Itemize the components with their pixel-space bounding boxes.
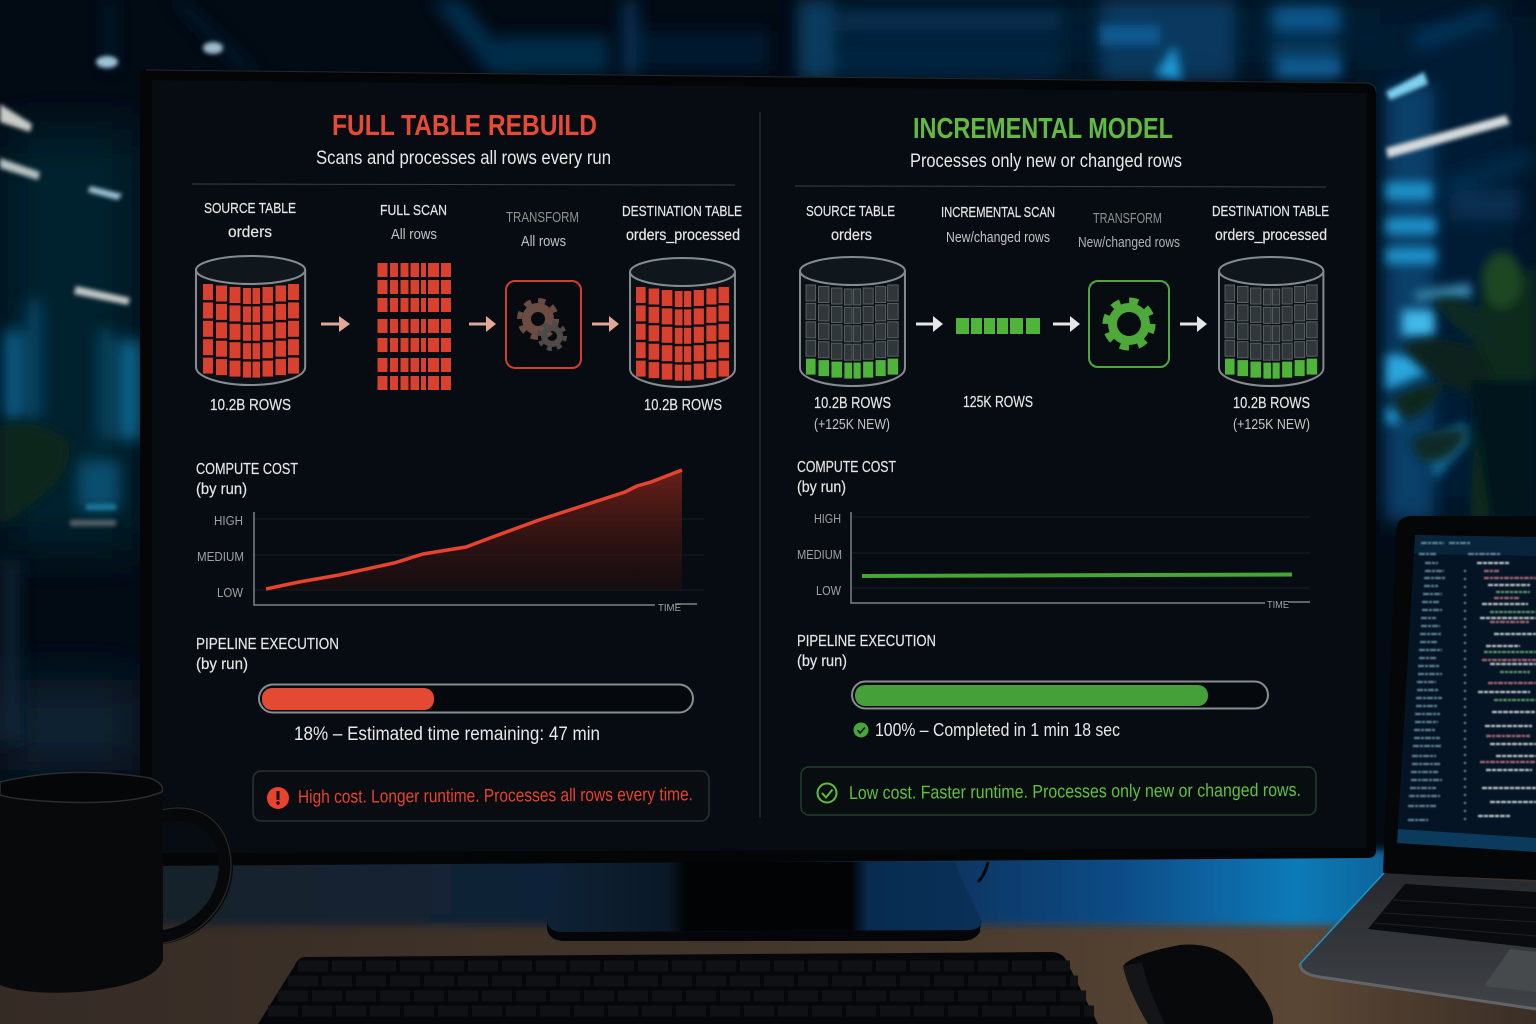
compute cost chart flat: HIGH — [814, 511, 841, 526]
destination label right: orders_processed — [1215, 227, 1327, 244]
compute cost chart rising — [197, 470, 704, 614]
monitor — [140, 70, 1376, 866]
desk — [0, 850, 1536, 1024]
compute cost chart rising: LOW — [217, 585, 244, 600]
pipeline execution heading: PIPELINE EXECUTION — [196, 636, 339, 653]
125k rows: 125K ROWS — [963, 394, 1033, 411]
source table label right — [806, 203, 895, 244]
arrow 3 — [592, 316, 619, 332]
progress bar 100% — [852, 682, 1268, 708]
keyboard — [258, 952, 1098, 1024]
compute cost heading right — [797, 459, 896, 496]
title: incremental model: INCREMENTAL MODEL — [913, 113, 1173, 145]
source table label right: orders — [831, 227, 872, 244]
full scan row grid — [378, 263, 451, 390]
pipeline execution heading: (by run) — [196, 656, 248, 673]
pipeline execution heading right: (by run) — [797, 653, 847, 670]
transform box with gears — [506, 281, 581, 368]
source rows count: 10.2B ROWS — [210, 397, 291, 414]
full scan label: FULL SCAN — [380, 202, 447, 219]
arrow 5 — [1053, 316, 1080, 332]
transform label — [506, 209, 579, 250]
compute cost heading right: (by run) — [797, 479, 846, 496]
compute cost chart rising: TIME — [658, 603, 681, 614]
source cylinder with new rows — [800, 257, 905, 386]
plant right — [1392, 252, 1536, 520]
destination cylinder red — [630, 258, 735, 387]
panel: full table rebuild — [192, 110, 742, 821]
source rows count right: (+125K NEW) — [814, 417, 890, 433]
icon: small check — [854, 722, 868, 738]
compute cost heading right: COMPUTE COST — [797, 459, 896, 476]
transform label right: TRANSFORM — [1093, 210, 1162, 227]
destination cylinder with new rows — [1219, 257, 1323, 386]
destination table label — [622, 203, 742, 244]
subtitle right: Processes only new or changed rows — [910, 151, 1182, 172]
compute cost heading — [196, 461, 298, 498]
source table label right: SOURCE TABLE — [806, 203, 895, 220]
transform label: TRANSFORM — [506, 209, 579, 226]
compute cost heading: COMPUTE COST — [196, 461, 298, 478]
transform label right: New/changed rows — [1078, 235, 1180, 251]
compute cost chart flat: LOW — [816, 583, 842, 598]
source table label: orders — [228, 224, 272, 241]
destination table label: orders_processed — [626, 227, 740, 244]
compute cost chart rising: MEDIUM — [197, 549, 244, 564]
source rows count right — [814, 395, 891, 433]
icon: warning — [267, 787, 289, 809]
full scan label: All rows — [391, 227, 437, 243]
arrow 1 — [321, 316, 350, 332]
source table label: SOURCE TABLE — [204, 200, 296, 217]
incremental rows strip — [956, 318, 1040, 334]
laptop — [1300, 516, 1536, 1009]
compute cost chart rising: HIGH — [214, 513, 243, 528]
compute cost heading: (by run) — [196, 481, 247, 498]
icon: check circle — [818, 784, 836, 802]
laptop base — [1300, 873, 1536, 1008]
code lines — [1408, 543, 1536, 820]
progress caption right: 100% – Completed in 1 min 18 sec — [875, 720, 1120, 740]
transform label: All rows — [521, 234, 566, 250]
transform box with green gear — [1089, 281, 1169, 367]
arrow 6 — [1180, 316, 1207, 332]
incremental scan label: INCREMENTAL SCAN — [941, 204, 1055, 221]
source table label — [204, 200, 296, 241]
destination rows count right: (+125K NEW) — [1233, 417, 1310, 433]
source cylinder red — [196, 256, 305, 385]
mouse — [1123, 944, 1273, 1024]
callout: low cost: Low cost. Faster runtime. Processes only new or changed rows. — [849, 779, 1301, 803]
panel: incremental model — [795, 113, 1329, 815]
destination label right: DESTINATION TABLE — [1212, 203, 1329, 220]
source rows count right: 10.2B ROWS — [814, 395, 891, 412]
progress caption left: 18% – Estimated time remaining: 47 min — [294, 724, 600, 745]
pipeline execution heading right — [797, 633, 936, 670]
laptop keyboard — [1368, 884, 1536, 948]
subtitle left: Scans and processes all rows every run — [316, 148, 611, 169]
transform label right — [1078, 210, 1180, 251]
destination label right — [1212, 203, 1329, 244]
plant left — [0, 423, 69, 525]
destination rows count: 10.2B ROWS — [644, 397, 722, 414]
laptop lid — [1383, 516, 1536, 880]
callout: low cost — [801, 767, 1316, 815]
arrow 4 — [916, 316, 943, 332]
destination rows count right — [1233, 395, 1310, 433]
pipeline execution heading — [196, 636, 339, 673]
compute cost chart flat: MEDIUM — [797, 547, 842, 562]
title: full table rebuild: FULL TABLE REBUILD — [332, 110, 597, 142]
full scan label — [380, 202, 447, 243]
callout: high cost — [253, 771, 709, 821]
compute cost chart flat: TIME — [1267, 600, 1289, 611]
incremental scan label: New/changed rows — [946, 230, 1050, 246]
compute cost chart flat — [797, 511, 1310, 611]
callout: high cost: High cost. Longer runtime. Processes all rows every time. — [298, 783, 693, 807]
incremental scan label — [941, 204, 1055, 246]
monitor stand — [547, 862, 981, 941]
pipeline execution heading right: PIPELINE EXECUTION — [797, 633, 936, 650]
coffee mug — [0, 772, 231, 993]
arrow 2 — [469, 316, 496, 332]
destination rows count right: 10.2B ROWS — [1233, 395, 1310, 412]
laptop trackpad — [1484, 949, 1536, 992]
destination table label: DESTINATION TABLE — [622, 203, 742, 220]
laptop screen — [1397, 535, 1536, 852]
progress bar 18% — [259, 684, 693, 712]
